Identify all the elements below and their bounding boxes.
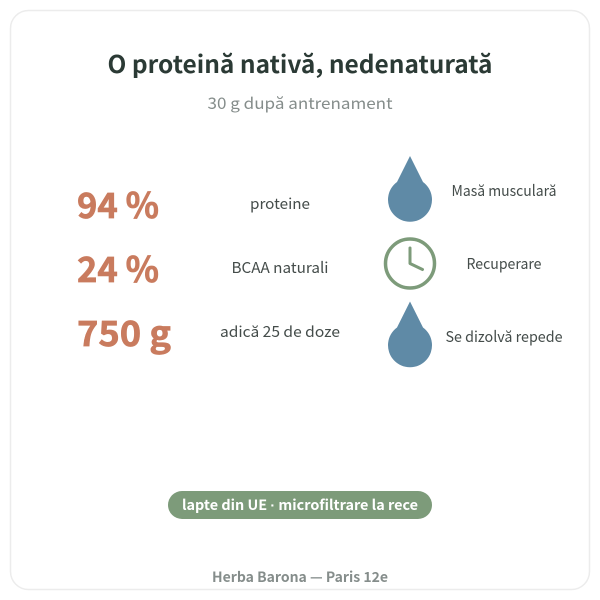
- title: O proteină nativă, nedenaturată: [108, 45, 493, 80]
- subtitle: 30 g după antrenament: [208, 90, 392, 114]
- label: adică 25 de doze: adică 25 de doze: [220, 321, 340, 342]
- badge: lapte din UE · microfiltrare la rece: [182, 495, 418, 515]
- icon: water drop 1: [388, 156, 432, 222]
- stat: 750 g: 750 g: [77, 306, 171, 357]
- label: Se dizolvă repede: Se dizolvă repede: [446, 326, 562, 347]
- stat: 94 %: 94 %: [77, 178, 159, 229]
- label: proteine: proteine: [250, 193, 310, 214]
- icon: water drop 2: [388, 302, 432, 367]
- label: Recuperare: Recuperare: [466, 253, 542, 274]
- footer: Herba Barona — Paris 12e: [212, 567, 388, 587]
- badge: [168, 491, 432, 519]
- label: BCAA naturali: BCAA naturali: [232, 257, 328, 278]
- icon: clock: [386, 239, 434, 288]
- stat: 24 %: 24 %: [77, 242, 159, 293]
- label: Masă musculară: Masă musculară: [452, 180, 556, 201]
